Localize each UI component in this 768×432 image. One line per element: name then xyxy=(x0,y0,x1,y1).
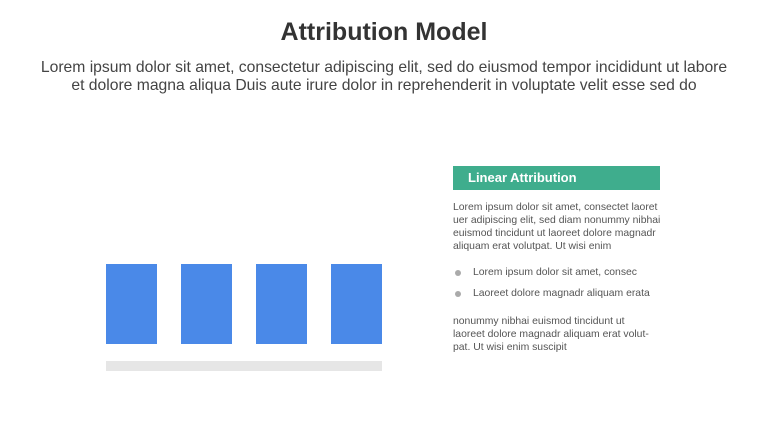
title: Attribution Model xyxy=(281,18,487,46)
paragraph 2: laoreet dolore magnadr aliquam erat volut- xyxy=(453,329,649,340)
heading bar xyxy=(453,166,660,190)
bar 4 xyxy=(331,264,382,344)
bar 2 xyxy=(181,264,232,344)
bullet list: Lorem ipsum dolor sit amet, consec xyxy=(473,267,637,278)
bullet list: Laoreet dolore magnadr aliquam erata xyxy=(473,288,650,299)
bar 1 xyxy=(106,264,157,344)
paragraph 1: Lorem ipsum dolor sit amet, consectet laoret xyxy=(453,202,657,213)
paragraph 1: uer adipiscing elit, sed diam nonummy nibhai xyxy=(453,215,660,226)
paragraph 2: pat. Ut wisi enim suscipit xyxy=(453,342,567,353)
heading bar: Linear Attribution xyxy=(468,170,577,185)
paragraph 1: aliquam erat volutpat. Ut wisi enim xyxy=(453,241,611,252)
paragraph 2: nonummy nibhai euismod tincidunt ut xyxy=(453,316,625,327)
bullet list xyxy=(455,267,650,299)
subtitle xyxy=(41,59,727,94)
subtitle: Lorem ipsum dolor sit amet, consectetur adipiscing elit, sed do eiusmod tempor incididunt ut labore xyxy=(41,59,727,76)
baseline xyxy=(106,361,382,371)
paragraph 1 xyxy=(453,202,660,252)
bar 3 xyxy=(256,264,307,344)
paragraph 1: euismod tincidunt ut laoreet dolore magnadr xyxy=(453,228,656,239)
panel: linear attribution xyxy=(453,166,660,353)
paragraph 2 xyxy=(453,316,649,353)
subtitle: et dolore magna aliqua Duis aute irure dolor in reprehenderit in voluptate velit esse sed do xyxy=(71,77,697,94)
chart: bars xyxy=(106,264,382,371)
